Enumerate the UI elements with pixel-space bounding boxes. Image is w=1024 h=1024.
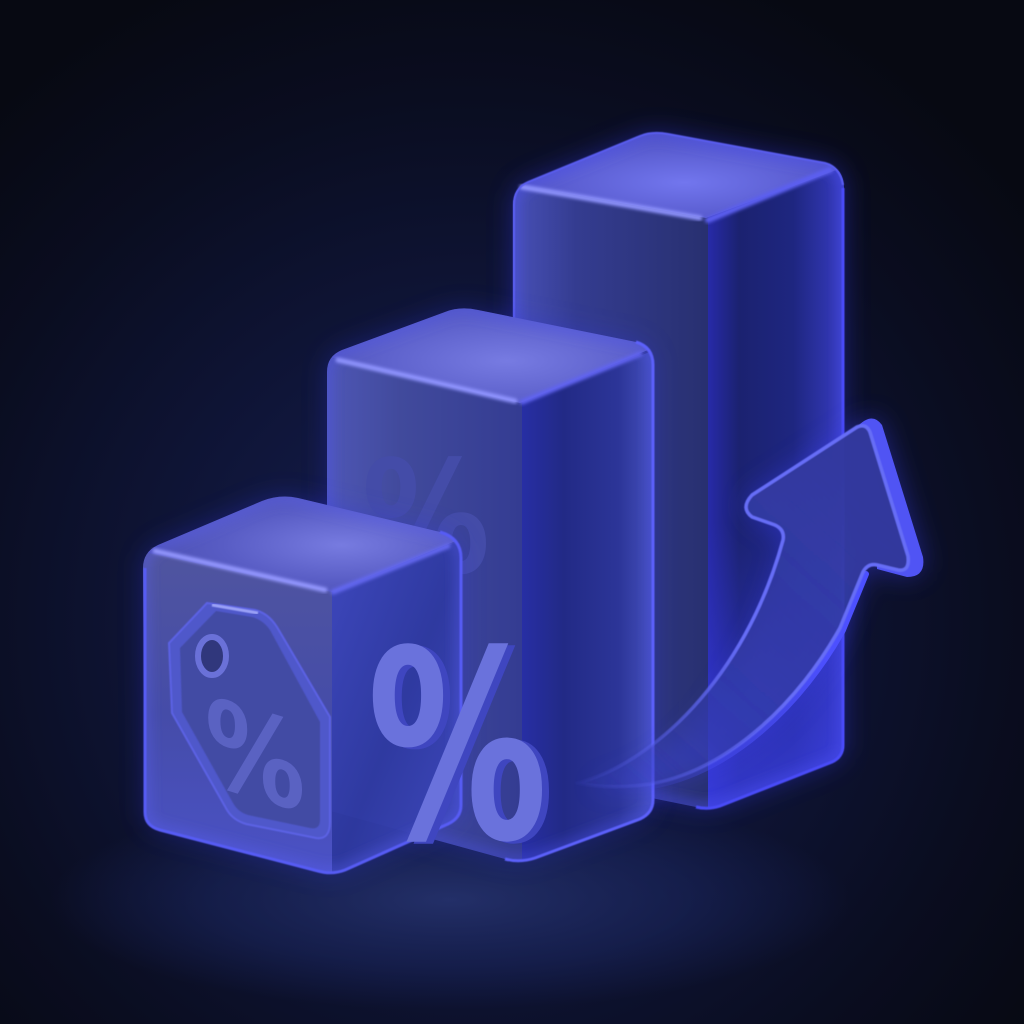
small circle on badge [198,637,226,675]
top face [332,308,647,403]
floor glow [50,790,850,1010]
rising arrow [577,418,923,788]
large floating percent sign: % [367,596,548,901]
right face [708,165,850,815]
octagon tag badge [169,603,330,841]
left face [135,545,332,880]
right face [332,544,460,872]
left face [320,355,522,870]
large floating percent sign: % [374,598,555,903]
small cube [135,488,468,880]
top face [526,133,837,218]
percent sign on medium bar: % [362,428,490,609]
edge highlights [522,187,700,218]
right face [522,348,660,870]
edge highlights [155,551,325,590]
medium bar [320,298,660,870]
left face [505,180,708,815]
top face [148,496,454,592]
tall bar [505,125,850,815]
percent sign on badge: % [205,671,305,841]
edge highlights [338,360,515,401]
arrow depth edge [652,418,923,786]
arrow face [577,426,908,787]
